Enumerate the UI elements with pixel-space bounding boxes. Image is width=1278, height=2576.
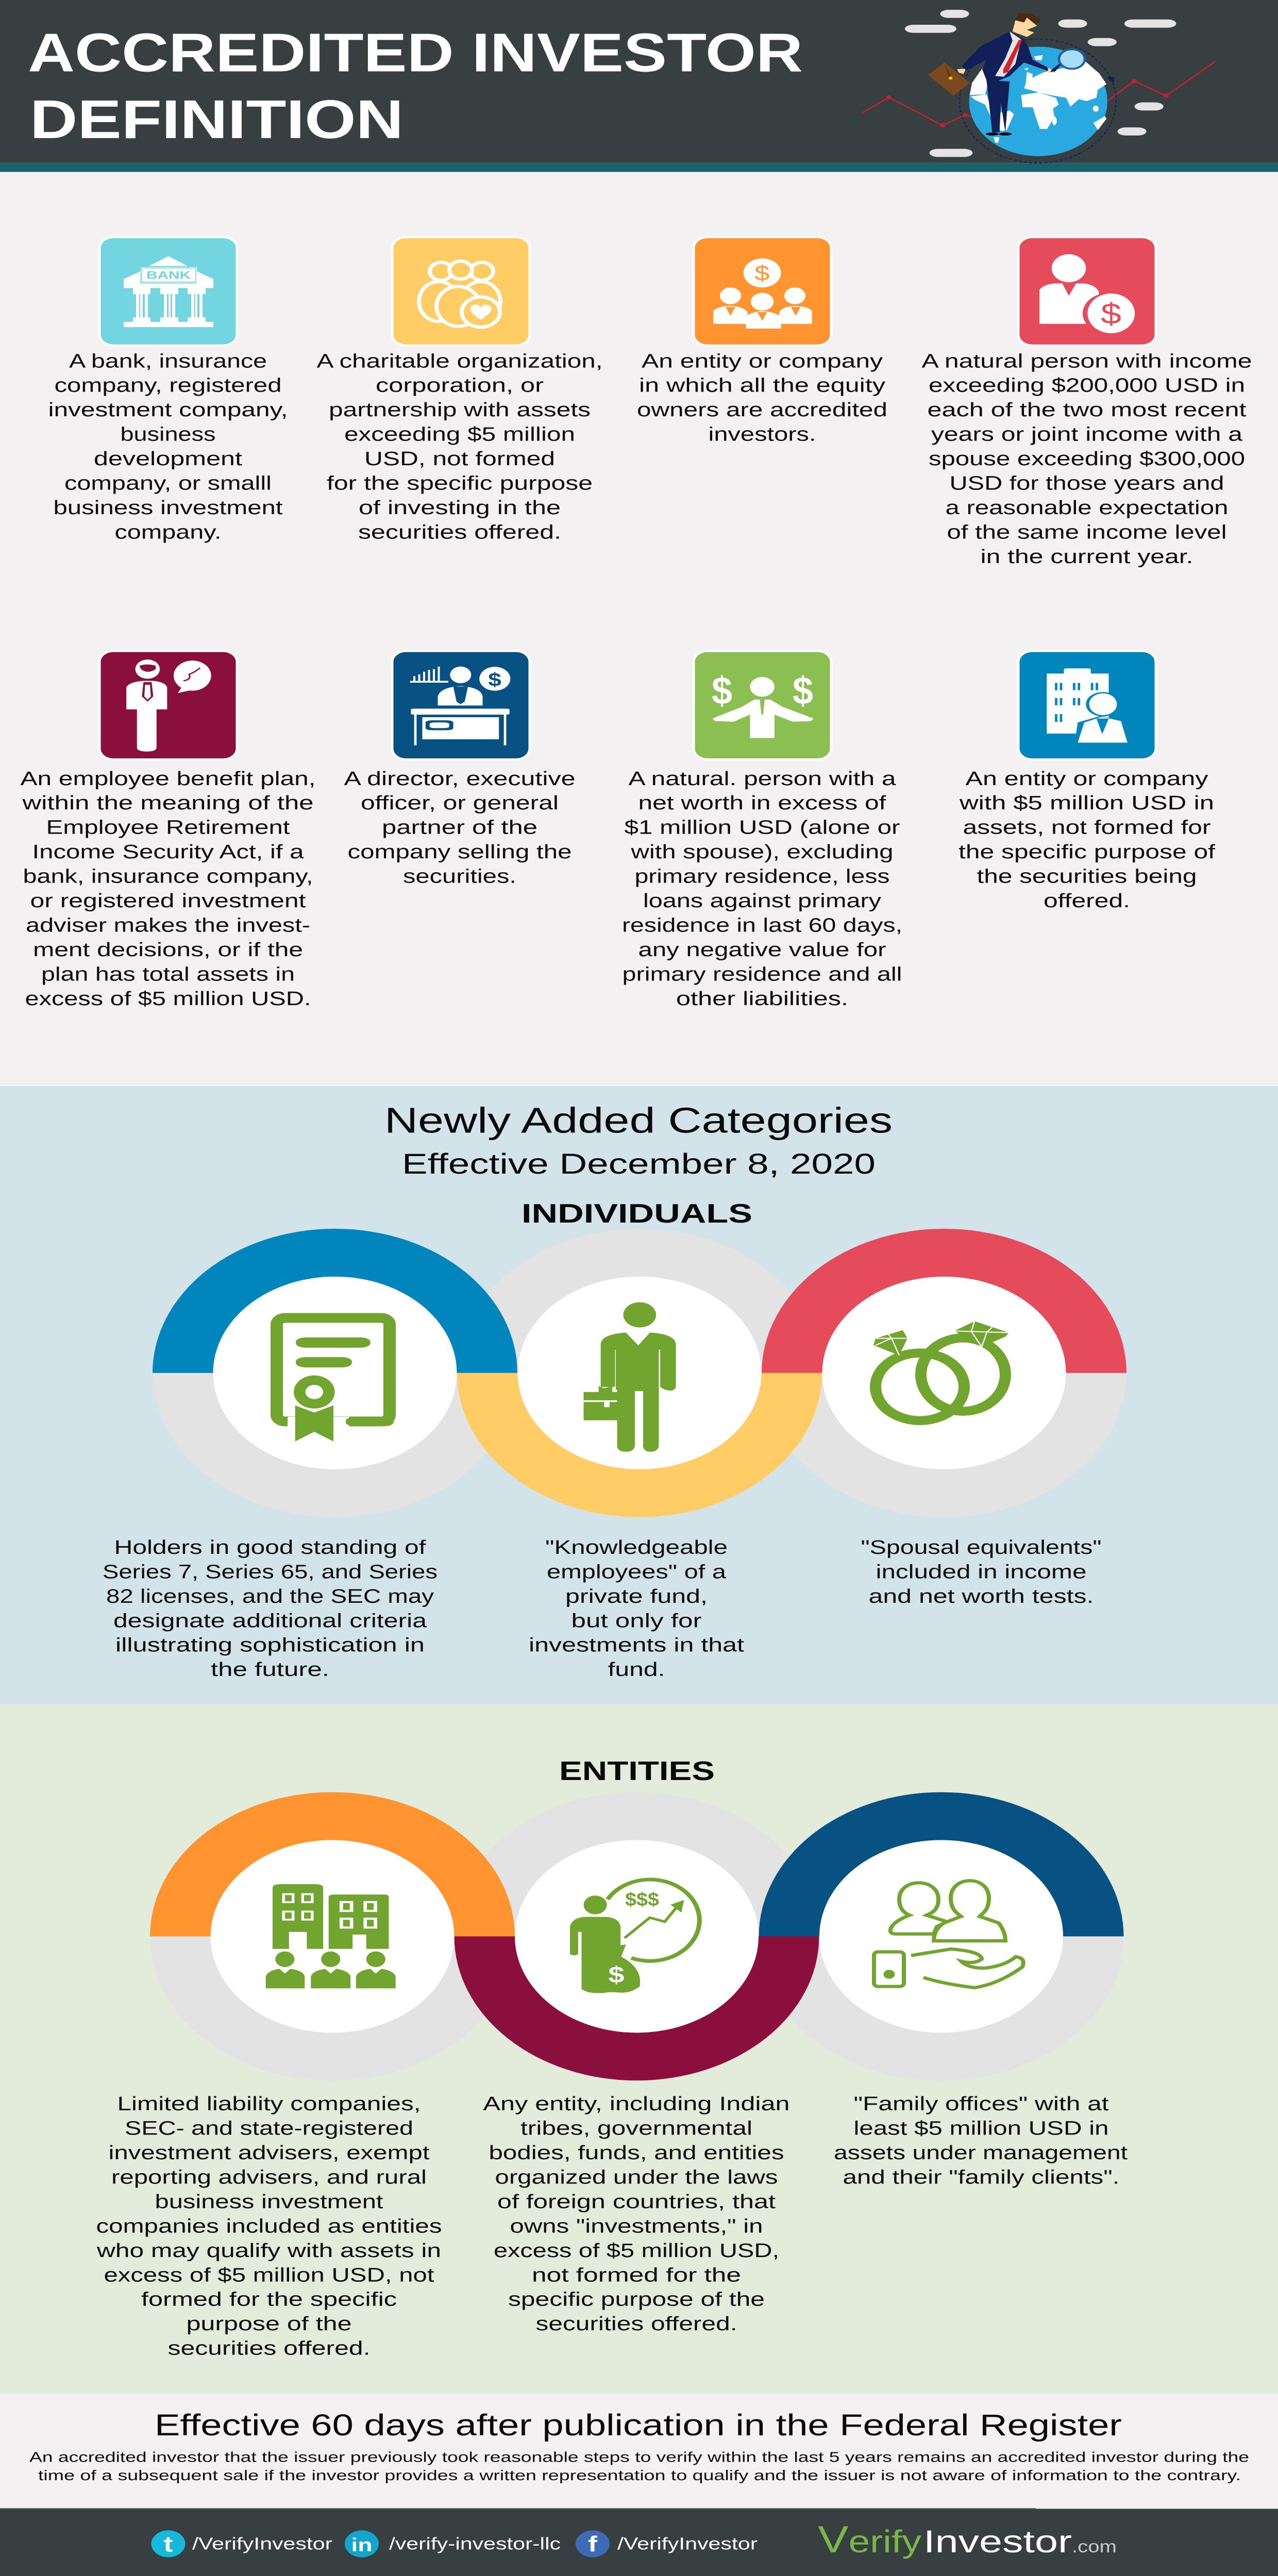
text: director: A director, executive	[344, 768, 576, 790]
text: knowledgeable employees: private fund,	[565, 1586, 708, 1607]
text: linkedin handle: /verify-investor-llc	[389, 2535, 561, 2553]
text: equity owners: in which all the equity	[639, 375, 885, 396]
text: employee benefit plan: Income Security Act, if a	[32, 841, 305, 863]
text: licenses: Series 7, Series 65, and Series	[103, 1561, 438, 1583]
icon: investor with money bag and growth arrow: $	[608, 1962, 625, 1988]
text: charity: exceeding $5 million	[344, 423, 575, 445]
text: charity: partnership with assets	[329, 399, 591, 421]
text: any entity: excess of $5 million USD,	[494, 2240, 779, 2262]
panel: original definitions, row 2	[20, 651, 1216, 1010]
text: LLCs and advisers: companies included as entities	[96, 2215, 442, 2237]
text: person with income: of the same income level	[947, 521, 1227, 543]
icon: certificate	[277, 1318, 394, 1442]
text: employee benefit plan: Employee Retirement	[46, 817, 290, 838]
icon: person with income	[1018, 237, 1156, 346]
text: entity with assets: offered.	[1044, 890, 1130, 912]
text: bank: company, registered	[55, 375, 282, 396]
logo: VerifyInvestor.com: .com	[1072, 2537, 1117, 2556]
text: knowledgeable employees	[529, 1537, 744, 1681]
icon: entity with assets	[1018, 651, 1156, 759]
text: employee benefit plan: bank, insurance company,	[23, 866, 313, 887]
text: net worth: $1 million USD (alone or	[624, 817, 900, 838]
icon: investor with money bag and growth arrow	[570, 1879, 699, 1993]
text: net worth: primary residence, less	[635, 866, 889, 887]
text: charity: USD, not formed	[364, 448, 555, 470]
text: person with income: each of the two most recent	[928, 399, 1246, 421]
text: net worth: any negative value for	[638, 939, 886, 961]
text: family offices: least $5 million USD in	[853, 2117, 1108, 2139]
heading: effective 60 days: Effective 60 days after publication in the Federal Register	[155, 2409, 1122, 2442]
title: ACCREDITED INVESTOR	[28, 22, 803, 83]
text: net worth: other liabilities.	[676, 988, 848, 1010]
icon: employee benefit plan	[99, 651, 237, 759]
text: bank: company, or smalll	[64, 472, 272, 494]
text: bank: business	[121, 423, 215, 445]
text: net worth: loans against primary	[643, 890, 881, 912]
text: reasonable steps note: time of a subsequent sale if the investor provides a written representation to qualify and the issuer is not aware of information to the contrary.	[38, 2467, 1241, 2483]
text: bank: investment company,	[48, 399, 288, 421]
text: LLCs and advisers: securities offered.	[168, 2337, 371, 2359]
header banner	[0, 0, 1278, 172]
text: person with income: A natural person with income	[922, 350, 1252, 372]
title: DEFINITION	[30, 89, 403, 150]
text: twitter handle: /VerifyInvestor	[192, 2535, 332, 2553]
text: charity: for the specific purpose	[327, 472, 593, 494]
text: any entity: owns "investments," in	[510, 2215, 763, 2237]
icon: wedding rings	[873, 1321, 1009, 1420]
icon: knowledgeable employee	[584, 1302, 676, 1452]
text: equity owners	[637, 350, 887, 445]
text: bank: A bank, insurance	[69, 350, 267, 372]
icon: twitter: t	[164, 2532, 173, 2556]
text: entity with assets	[959, 768, 1216, 912]
panel: effective date note	[29, 2409, 1249, 2483]
text: family offices: and their "family clients".	[843, 2166, 1120, 2188]
text: knowledgeable employees: "Knowledgeable	[545, 1537, 728, 1558]
text: any entity: bodies, funds, and entities	[489, 2142, 784, 2164]
text: entity with assets: the specific purpose of	[959, 841, 1216, 863]
text: reasonable steps note	[29, 2449, 1249, 2483]
text: reasonable steps note: An accredited investor that the issuer previously took reasonable steps to verify within the last 5 years remains an accredited investor during the	[29, 2449, 1249, 2465]
icon: linkedin	[345, 2530, 379, 2557]
text: family offices: "Family offices" with at	[853, 2093, 1108, 2115]
text: employee benefit plan	[20, 768, 315, 1010]
icon: facebook: f	[588, 2532, 598, 2556]
text: equity owners: An entity or company	[642, 350, 883, 372]
heading: newly added categories	[384, 1100, 893, 1180]
text: director: securities.	[403, 866, 516, 887]
text: bank: company.	[114, 521, 222, 543]
panel: newly added entities	[0, 1704, 1278, 2394]
text: spousal equivalents: "Spousal equivalents"	[861, 1537, 1102, 1558]
icon: director at desk	[392, 651, 530, 759]
text: any entity: securities offered.	[536, 2313, 737, 2335]
text: person with income: spouse exceeding $300,000	[929, 448, 1245, 470]
text: family offices	[834, 2093, 1128, 2188]
text: licenses: Holders in good standing of	[114, 1537, 427, 1558]
text: person with income: USD for those years and	[950, 472, 1224, 494]
text: LLCs and advisers: SEC- and state-registered	[125, 2117, 413, 2139]
text: LLCs and advisers: purpose of the	[187, 2313, 352, 2335]
text: any entity: not formed for the	[532, 2264, 741, 2286]
heading: newly added categories: Newly Added Categories	[384, 1100, 893, 1140]
title	[28, 22, 803, 150]
icon: equity owners	[694, 237, 831, 346]
text: LLCs and advisers: excess of $5 million USD, not	[104, 2264, 434, 2286]
icon: director at desk: $	[488, 669, 501, 690]
text: spousal equivalents: included in income	[876, 1561, 1087, 1583]
panel: newly added individuals	[0, 1086, 1278, 1704]
heading: newly added categories: Effective December 8, 2020	[402, 1148, 876, 1180]
text: person with income: in the current year.	[981, 546, 1193, 568]
text: facebook handle: /VerifyInvestor	[617, 2535, 758, 2553]
text: licenses: designate additional criteria	[113, 1610, 427, 1632]
text: person with income	[922, 350, 1252, 568]
footer bar	[0, 2508, 1278, 2576]
heading: individuals: INDIVIDUALS	[522, 1198, 752, 1228]
text: entity with assets: assets, not formed for	[963, 817, 1211, 838]
text: charity: of investing in the	[359, 497, 561, 519]
text: entity with assets: with $5 million USD in	[959, 792, 1214, 814]
text: licenses: 82 licenses, and the SEC may	[106, 1586, 434, 1607]
icon: company buildings and people	[266, 1884, 396, 1988]
icon: bank	[99, 237, 237, 346]
text: net worth: residence in last 60 days,	[622, 914, 902, 936]
text: entity with assets: the securities being	[977, 866, 1197, 887]
text: net worth: net worth in excess of	[638, 792, 887, 814]
icon: bank: BANK	[146, 269, 191, 281]
chart: three linked circles, entities	[150, 1792, 1123, 2080]
icon: charity	[392, 237, 530, 346]
text: employee benefit plan: within the meaning of the	[22, 792, 314, 814]
logo: VerifyInvestor.com: Investor	[923, 2523, 1072, 2559]
heading: entities: ENTITIES	[559, 1755, 715, 1786]
text: bank: business investment	[53, 497, 282, 519]
panel: original definitions, row 1	[48, 237, 1252, 568]
icon: net worth person	[694, 651, 831, 759]
icon: twitter	[152, 2530, 186, 2557]
text: family offices: assets under management	[834, 2142, 1128, 2164]
text: person with income: exceeding $200,000 USD in	[929, 375, 1245, 396]
text: LLCs and advisers	[96, 2093, 442, 2359]
chart: three linked circles, individuals	[153, 1229, 1126, 1517]
icon: investor with money bag and growth arrow: $$$	[625, 1889, 659, 1910]
text: equity owners: investors.	[708, 423, 816, 445]
icon: linkedin: in	[351, 2534, 372, 2555]
text: LLCs and advisers: reporting advisers, and rural	[111, 2166, 427, 2188]
text: licenses: the future.	[211, 1659, 329, 1681]
text: LLCs and advisers: business investment	[155, 2191, 383, 2213]
text: net worth: A natural. person with a	[629, 768, 897, 790]
text: charity: A charitable organization,	[316, 350, 602, 372]
text: spousal equivalents: and net worth tests.	[869, 1586, 1094, 1607]
icon: net worth person: $	[793, 669, 813, 713]
text: charity: corporation, or	[376, 375, 544, 396]
text: employee benefit plan: ment decisions, or if the	[33, 939, 303, 961]
text: net worth: with spouse), excluding	[630, 841, 894, 863]
icon: family offices	[874, 1880, 1023, 1988]
text: LLCs and advisers: who may qualify with assets in	[96, 2240, 441, 2262]
text: charity	[316, 350, 603, 543]
text: bank: development	[94, 448, 242, 470]
logo: VerifyInvestor.com	[818, 2518, 1117, 2561]
text: knowledgeable employees: investments in that	[529, 1634, 744, 1656]
text: LLCs and advisers: investment advisers, exempt	[108, 2142, 429, 2164]
text: director: company selling the	[347, 841, 572, 863]
text: entity with assets: An entity or company	[966, 768, 1208, 790]
text: employee benefit plan: An employee benefit plan,	[20, 768, 315, 790]
text: spousal equivalents	[861, 1537, 1102, 1607]
icon: facebook	[576, 2530, 610, 2557]
icon: equity owners: $	[755, 261, 769, 285]
text: net worth: primary residence and all	[623, 963, 902, 985]
text: equity owners: owners are accredited	[637, 399, 887, 421]
text: licenses: illustrating sophistication in	[115, 1634, 425, 1656]
text: any entity	[483, 2093, 790, 2335]
text: employee benefit plan: adviser makes the invest-	[26, 914, 310, 936]
text: LLCs and advisers: Limited liability companies,	[117, 2093, 421, 2115]
text: net worth	[622, 768, 902, 1010]
text: any entity: of foreign countries, that	[497, 2191, 776, 2213]
logo: VerifyInvestor.com: Verify	[818, 2518, 922, 2561]
text: director	[344, 768, 576, 887]
text: charity: securities offered.	[358, 521, 561, 543]
icon: net worth person: $	[712, 669, 732, 713]
text: bank	[48, 350, 288, 543]
text: knowledgeable employees: but only for	[571, 1610, 702, 1632]
text: any entity: organized under the laws	[495, 2166, 778, 2188]
text: licenses	[103, 1537, 438, 1681]
illustration: businessman inspecting a globe	[862, 10, 1215, 163]
text: person with income: years or joint income with a	[931, 423, 1243, 445]
text: any entity: Any entity, including Indian	[483, 2093, 790, 2115]
text: knowledgeable employees: employees" of a	[547, 1561, 727, 1583]
text: director: partner of the	[382, 817, 537, 838]
text: knowledgeable employees: fund.	[608, 1659, 665, 1681]
text: any entity: specific purpose of the	[508, 2289, 765, 2310]
text: employee benefit plan: excess of $5 million USD.	[25, 988, 311, 1010]
text: any entity: tribes, governmental	[520, 2117, 752, 2139]
text: LLCs and advisers: formed for the specific	[141, 2289, 397, 2310]
text: employee benefit plan: plan has total assets in	[41, 963, 295, 985]
icon: person with income: $	[1101, 297, 1121, 330]
text: director: officer, or general	[361, 792, 559, 814]
text: person with income: a reasonable expectation	[946, 497, 1229, 519]
text: employee benefit plan: or registered investment	[30, 890, 306, 912]
